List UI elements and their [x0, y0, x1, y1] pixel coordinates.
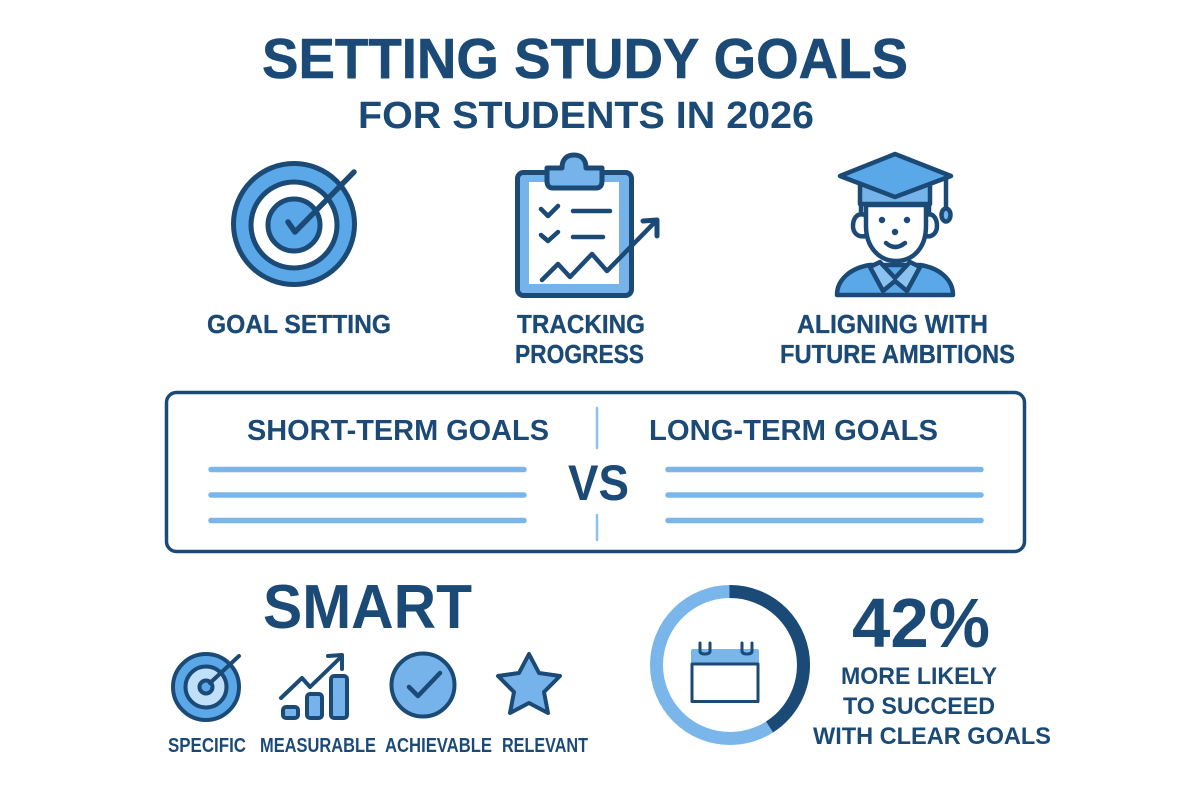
- icon: calendar: [691, 643, 759, 702]
- label: tracking progress: [515, 311, 645, 369]
- subtitle: FOR STUDENTS IN 2026: [358, 95, 814, 137]
- icon: clipboard with progress chart: [518, 155, 657, 296]
- short-term lines: [211, 470, 524, 520]
- title: SETTING STUDY GOALS: [262, 27, 908, 91]
- vs label: VS: [568, 455, 629, 511]
- label: achievable: ACHIEVABLE: [385, 735, 492, 757]
- label: measurable: MEASURABLE: [260, 735, 376, 757]
- icon: measurable chart: [281, 655, 347, 718]
- icon: goal target: [234, 164, 354, 284]
- icon: relevant star: [498, 654, 560, 713]
- heading: short-term goals: SHORT-TERM GOALS: [247, 415, 549, 447]
- icon: graduate student: [837, 154, 953, 295]
- stat caption: TO SUCCEED: [843, 693, 995, 720]
- label: tracking progress: TRACKING: [517, 311, 645, 339]
- label: aligning with future ambitions: [780, 311, 1015, 369]
- long-term lines: [668, 470, 981, 520]
- stat caption: [813, 663, 1051, 750]
- label: aligning with future ambitions: ALIGNING WITH: [797, 311, 988, 339]
- label: tracking progress: PROGRESS: [515, 341, 644, 369]
- stat caption: MORE LIKELY: [841, 663, 997, 690]
- heading: smart: SMART: [263, 573, 472, 642]
- label: specific: SPECIFIC: [168, 735, 246, 757]
- icon: achievable check: [392, 654, 454, 716]
- panel: short-term vs long-term goals: [166, 392, 1024, 552]
- label: relevant: RELEVANT: [502, 735, 588, 757]
- heading: long-term goals: LONG-TERM GOALS: [649, 415, 938, 447]
- label: aligning with future ambitions: FUTURE AMBITIONS: [780, 341, 1015, 369]
- stat caption: WITH CLEAR GOALS: [813, 723, 1051, 750]
- chart: 42% progress ring: [656, 592, 804, 738]
- stat: 42%: 42%: [852, 584, 990, 662]
- icon: specific target: [173, 654, 239, 720]
- label: goal setting: GOAL SETTING: [207, 311, 391, 339]
